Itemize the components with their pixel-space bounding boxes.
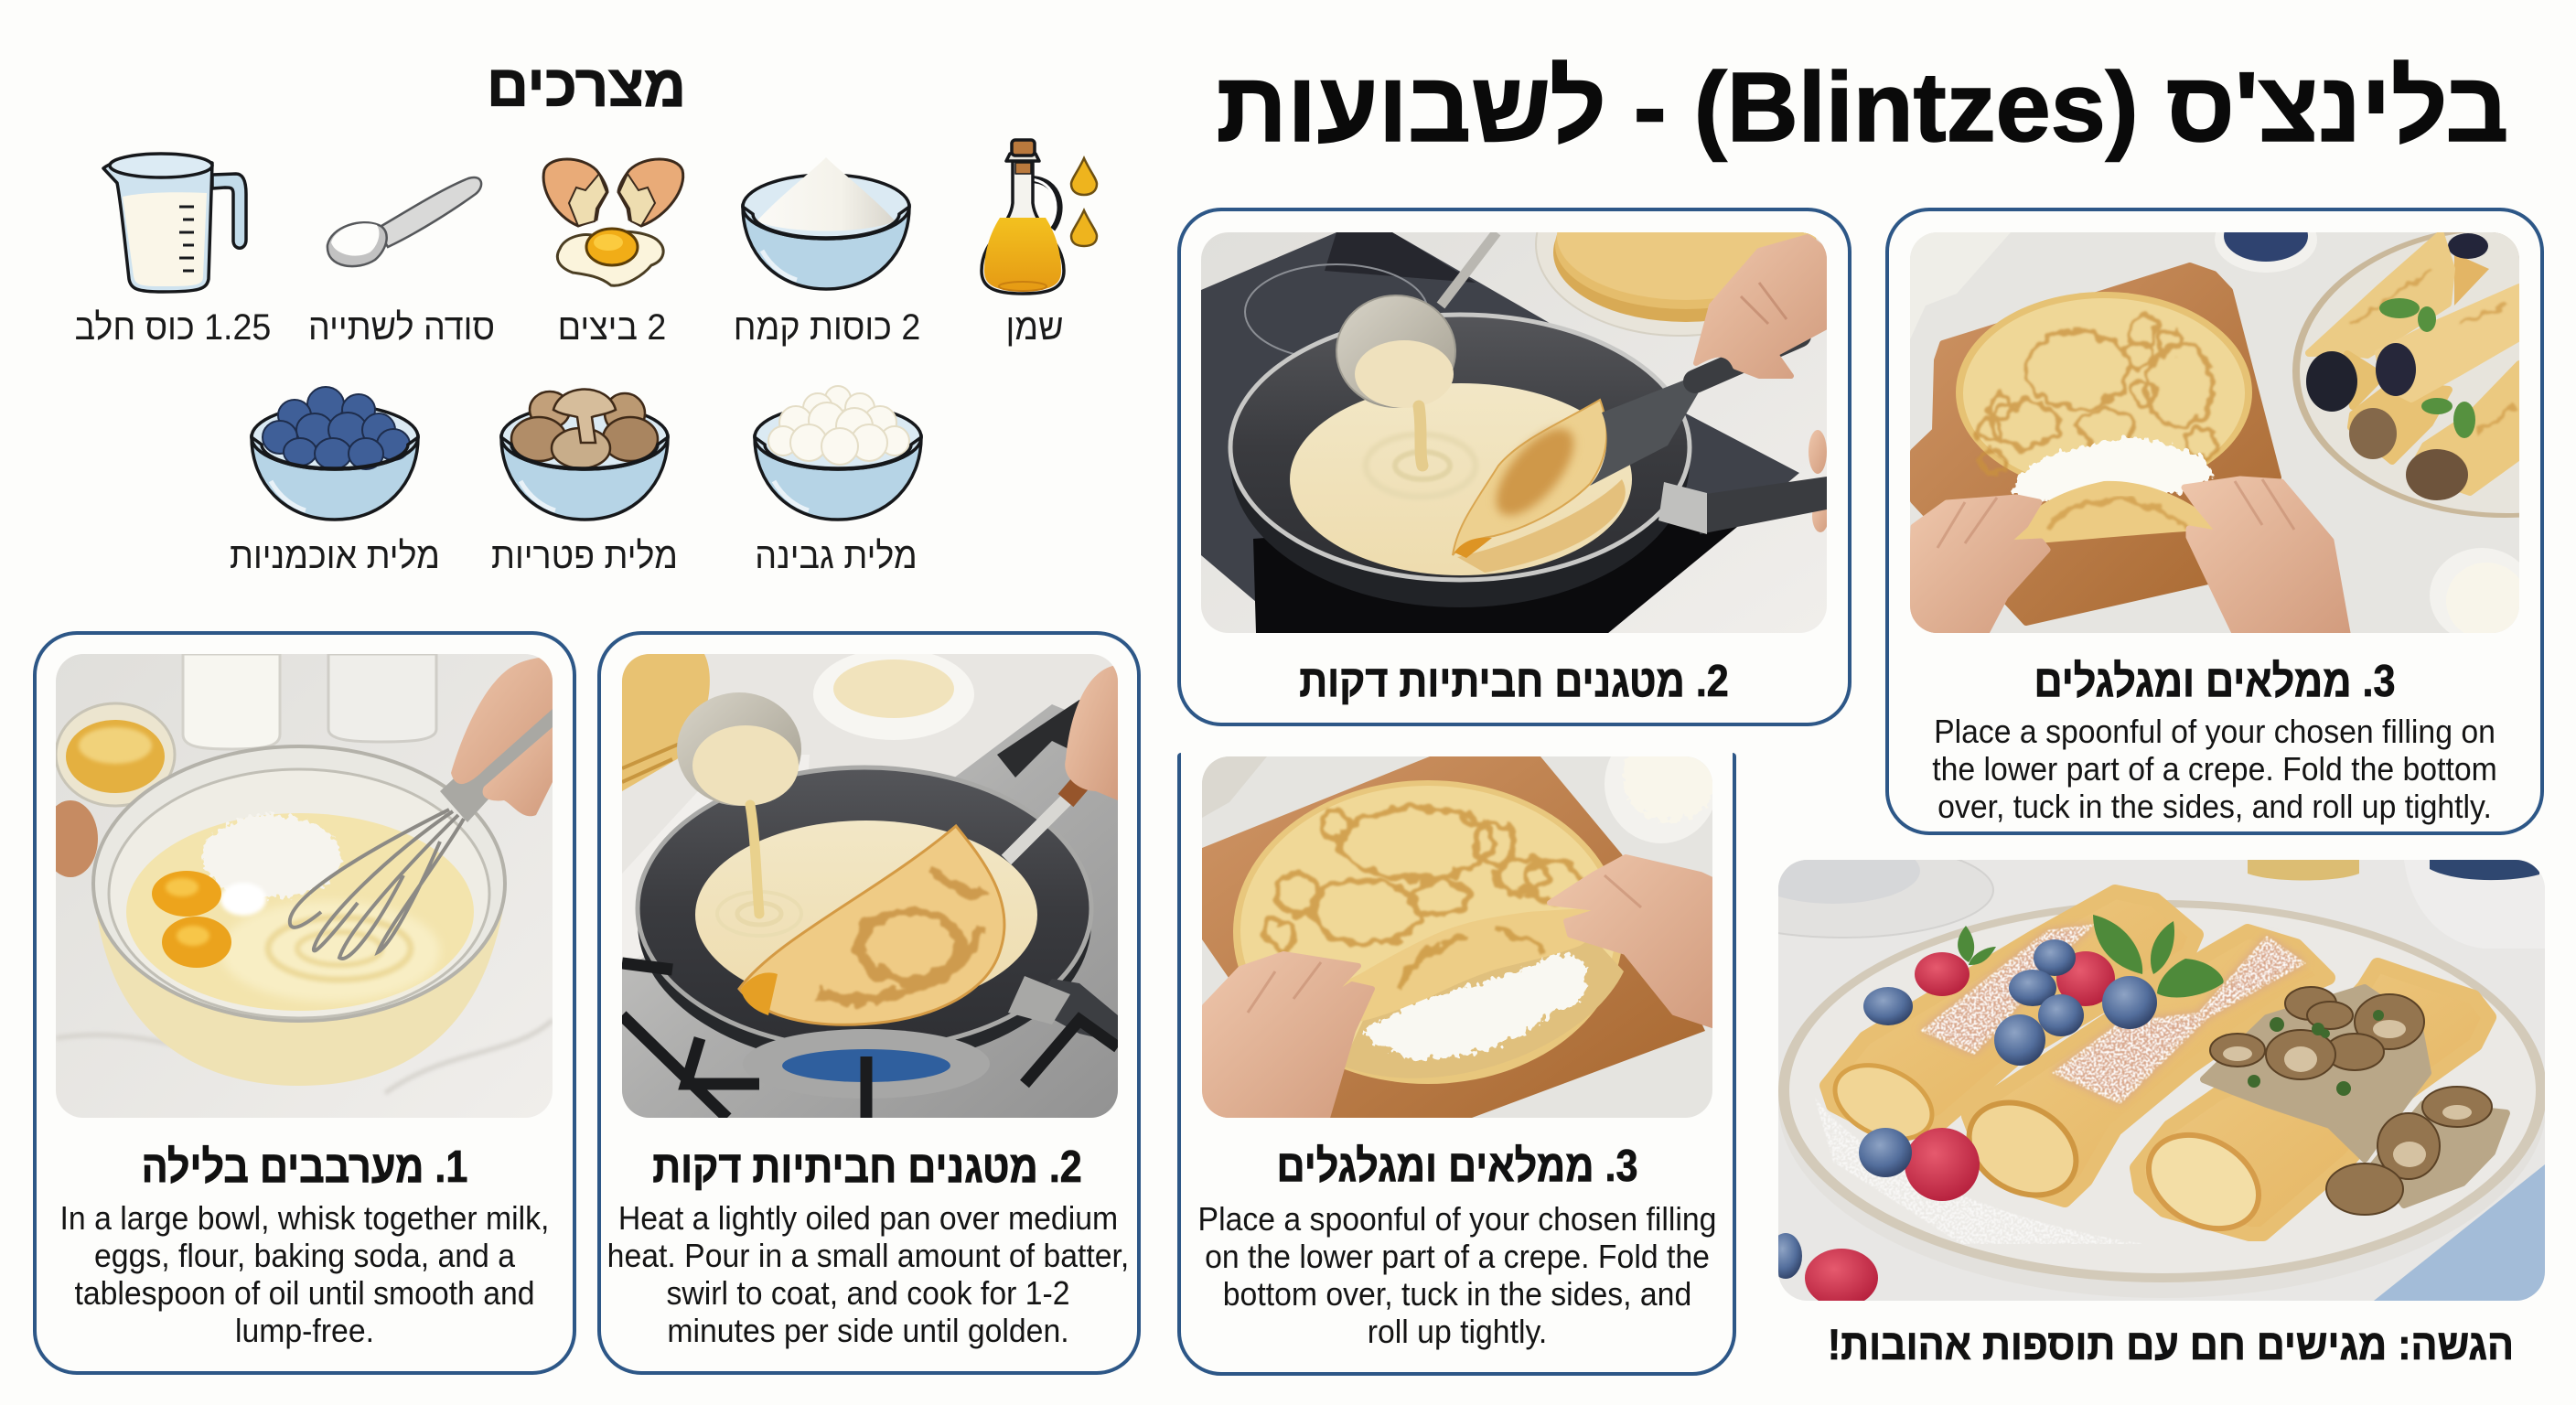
icon: cheese bowl [755,386,921,520]
panel: step 1 mix batter [33,223,2545,1375]
label: blueberry filling: מלית אוכמניות [230,536,440,576]
heading: step 1: 1. מערבבים בלילה [142,1142,467,1192]
text: step 1 instructions [60,1199,549,1349]
panel: ingredients icons [102,138,1098,521]
photo: pouring batter over gas stove [622,654,1118,1118]
heading: step 2: 2. מטגנים חביתיות דקות [652,1142,1082,1192]
label: eggs: 2 ביצים [558,307,666,348]
text: step 3 instructions: over, tuck in the sides, and roll up tightly. [1937,788,2492,825]
text: step 2 instructions: heat. Pour in a small amount of batter, [607,1237,1129,1274]
label: mushroom filling: מלית פטריות [491,536,678,576]
label: cheese filling: מלית גבינה [755,536,918,576]
icon: oil bottle [982,140,1064,294]
panel: step 3 fill and roll, close-up [1177,753,2545,1376]
icon: baking soda spoon [327,177,481,266]
icon: flour bowl [743,157,909,289]
text: step 3 instructions [1932,713,2497,825]
text: step 2 instructions [607,1199,1129,1349]
text: step 3 instructions repeat: on the lower part of a crepe. Fold the [1205,1238,1710,1275]
label: milk: 1.25 כוס חלב [75,307,271,348]
photo: pouring batter on induction hob [1201,232,1827,633]
text: step 2 instructions: swirl to coat, and cook for 1-2 [666,1274,1070,1312]
photo: filling crepe on wooden board [1910,232,2519,633]
icon: oil drops [1071,158,1097,246]
caption: serving: הגשה: מגישים חם עם תוספות אהובות! [1828,1320,2514,1368]
heading: step 3 repeat: 3. ממלאים ומגלגלים [1277,1142,1637,1191]
label: baking soda: סודה לשתייה [308,307,495,348]
text: step 1 instructions: lump-free. [235,1312,374,1349]
text: step 3 instructions: Place a spoonful of your chosen filling on [1934,713,2496,750]
text: step 3 instructions repeat: bottom over, tuck in the sides, and [1223,1275,1691,1313]
label: flour: 2 כוסות קמח [734,307,920,348]
icon: eggs [543,159,683,285]
icon: milk jug [103,154,246,292]
text: step 3 instructions: the lower part of a crepe. Fold the bottom [1932,750,2497,788]
photo: rolling crepe with cheese [1202,756,1712,1118]
text: step 3 instructions repeat: roll up tightly. [1368,1313,1547,1350]
panel: step 2 fry crepes [597,223,2545,1375]
photo: whisking batter in glass bowl [56,654,553,1118]
label: oil: שמן [1005,307,1064,348]
text: step 2 instructions: minutes per side until golden. [667,1312,1069,1349]
text: step 1 instructions: eggs, flour, baking soda, and a [94,1237,515,1274]
heading: step 2 repeat: 2. מטגנים חביתיות דקות [1299,657,1729,706]
icon: mushroom bowl [501,390,668,520]
text: step 2 instructions: Heat a lightly oiled pan over medium [618,1199,1118,1237]
text: step 3 instructions repeat [1198,1200,1716,1350]
heading: step 3: 3. ממלאים ומגלגלים [2034,657,2395,706]
panel: step 3 fill and roll, overhead [1177,208,2545,1339]
photo: plated blintzes with toppings [1778,860,2545,1301]
panel: step 2 fry crepes, induction variant [1177,208,2545,1339]
title: בלינצ'ס (Blintzes) - לשבועות [1217,51,2508,162]
text: step 1 instructions: In a large bowl, whisk together milk, [60,1199,549,1237]
heading: ingredients: מצרכים [487,53,686,119]
text: step 1 instructions: tablespoon of oil until smooth and [74,1274,535,1312]
icon: blueberry bowl [252,387,418,520]
panel: serving [1778,860,2545,1368]
text: step 3 instructions repeat: Place a spoonful of your chosen filling [1198,1200,1716,1238]
